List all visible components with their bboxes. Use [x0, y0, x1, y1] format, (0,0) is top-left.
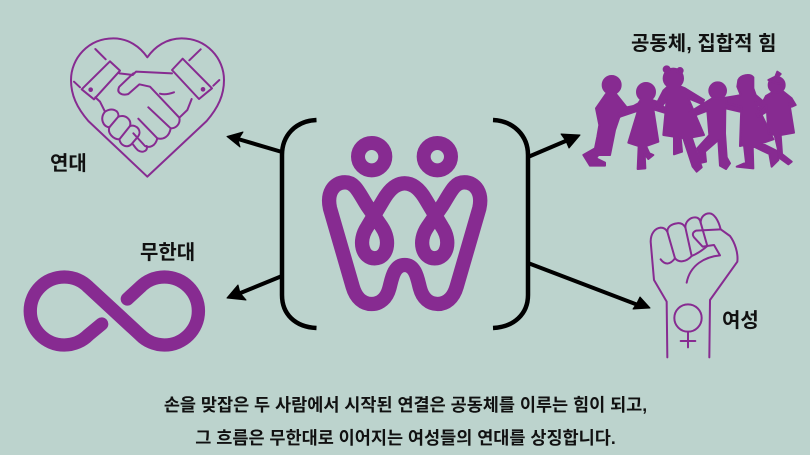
caption line 2: 그 흐름은 무한대로 이어지는 여성들의 연대를 상징합니다.	[195, 428, 616, 448]
arrow: to infinity	[227, 276, 282, 300]
icon: raised fist with female symbol	[651, 213, 738, 357]
child 5	[727, 75, 778, 168]
label: 공동체, 집합적 힘: 공동체, 집합적 힘	[631, 33, 776, 55]
icon: heart with handshake	[71, 38, 224, 177]
caption line 1: 손을 맞잡은 두 사람에서 시작된 연결은 공동체를 이루는 힘이 되고,	[164, 395, 647, 415]
icon: central logo	[329, 143, 480, 304]
left bracket	[282, 120, 316, 328]
child 3	[656, 66, 704, 172]
label: 무한대: 무한대	[140, 242, 195, 264]
child 2	[619, 83, 667, 169]
icon: infinity	[30, 277, 198, 345]
arrow: to children	[528, 134, 580, 157]
child 1	[583, 76, 638, 166]
label: 여성: 여성	[722, 310, 759, 332]
right bracket	[493, 120, 528, 328]
arrow: to heart	[227, 132, 282, 152]
child 4	[689, 82, 741, 169]
label: 연대: 연대	[50, 153, 87, 175]
arrow: to fist	[528, 263, 650, 309]
icon: children silhouette	[583, 66, 796, 172]
child 6	[757, 72, 796, 164]
